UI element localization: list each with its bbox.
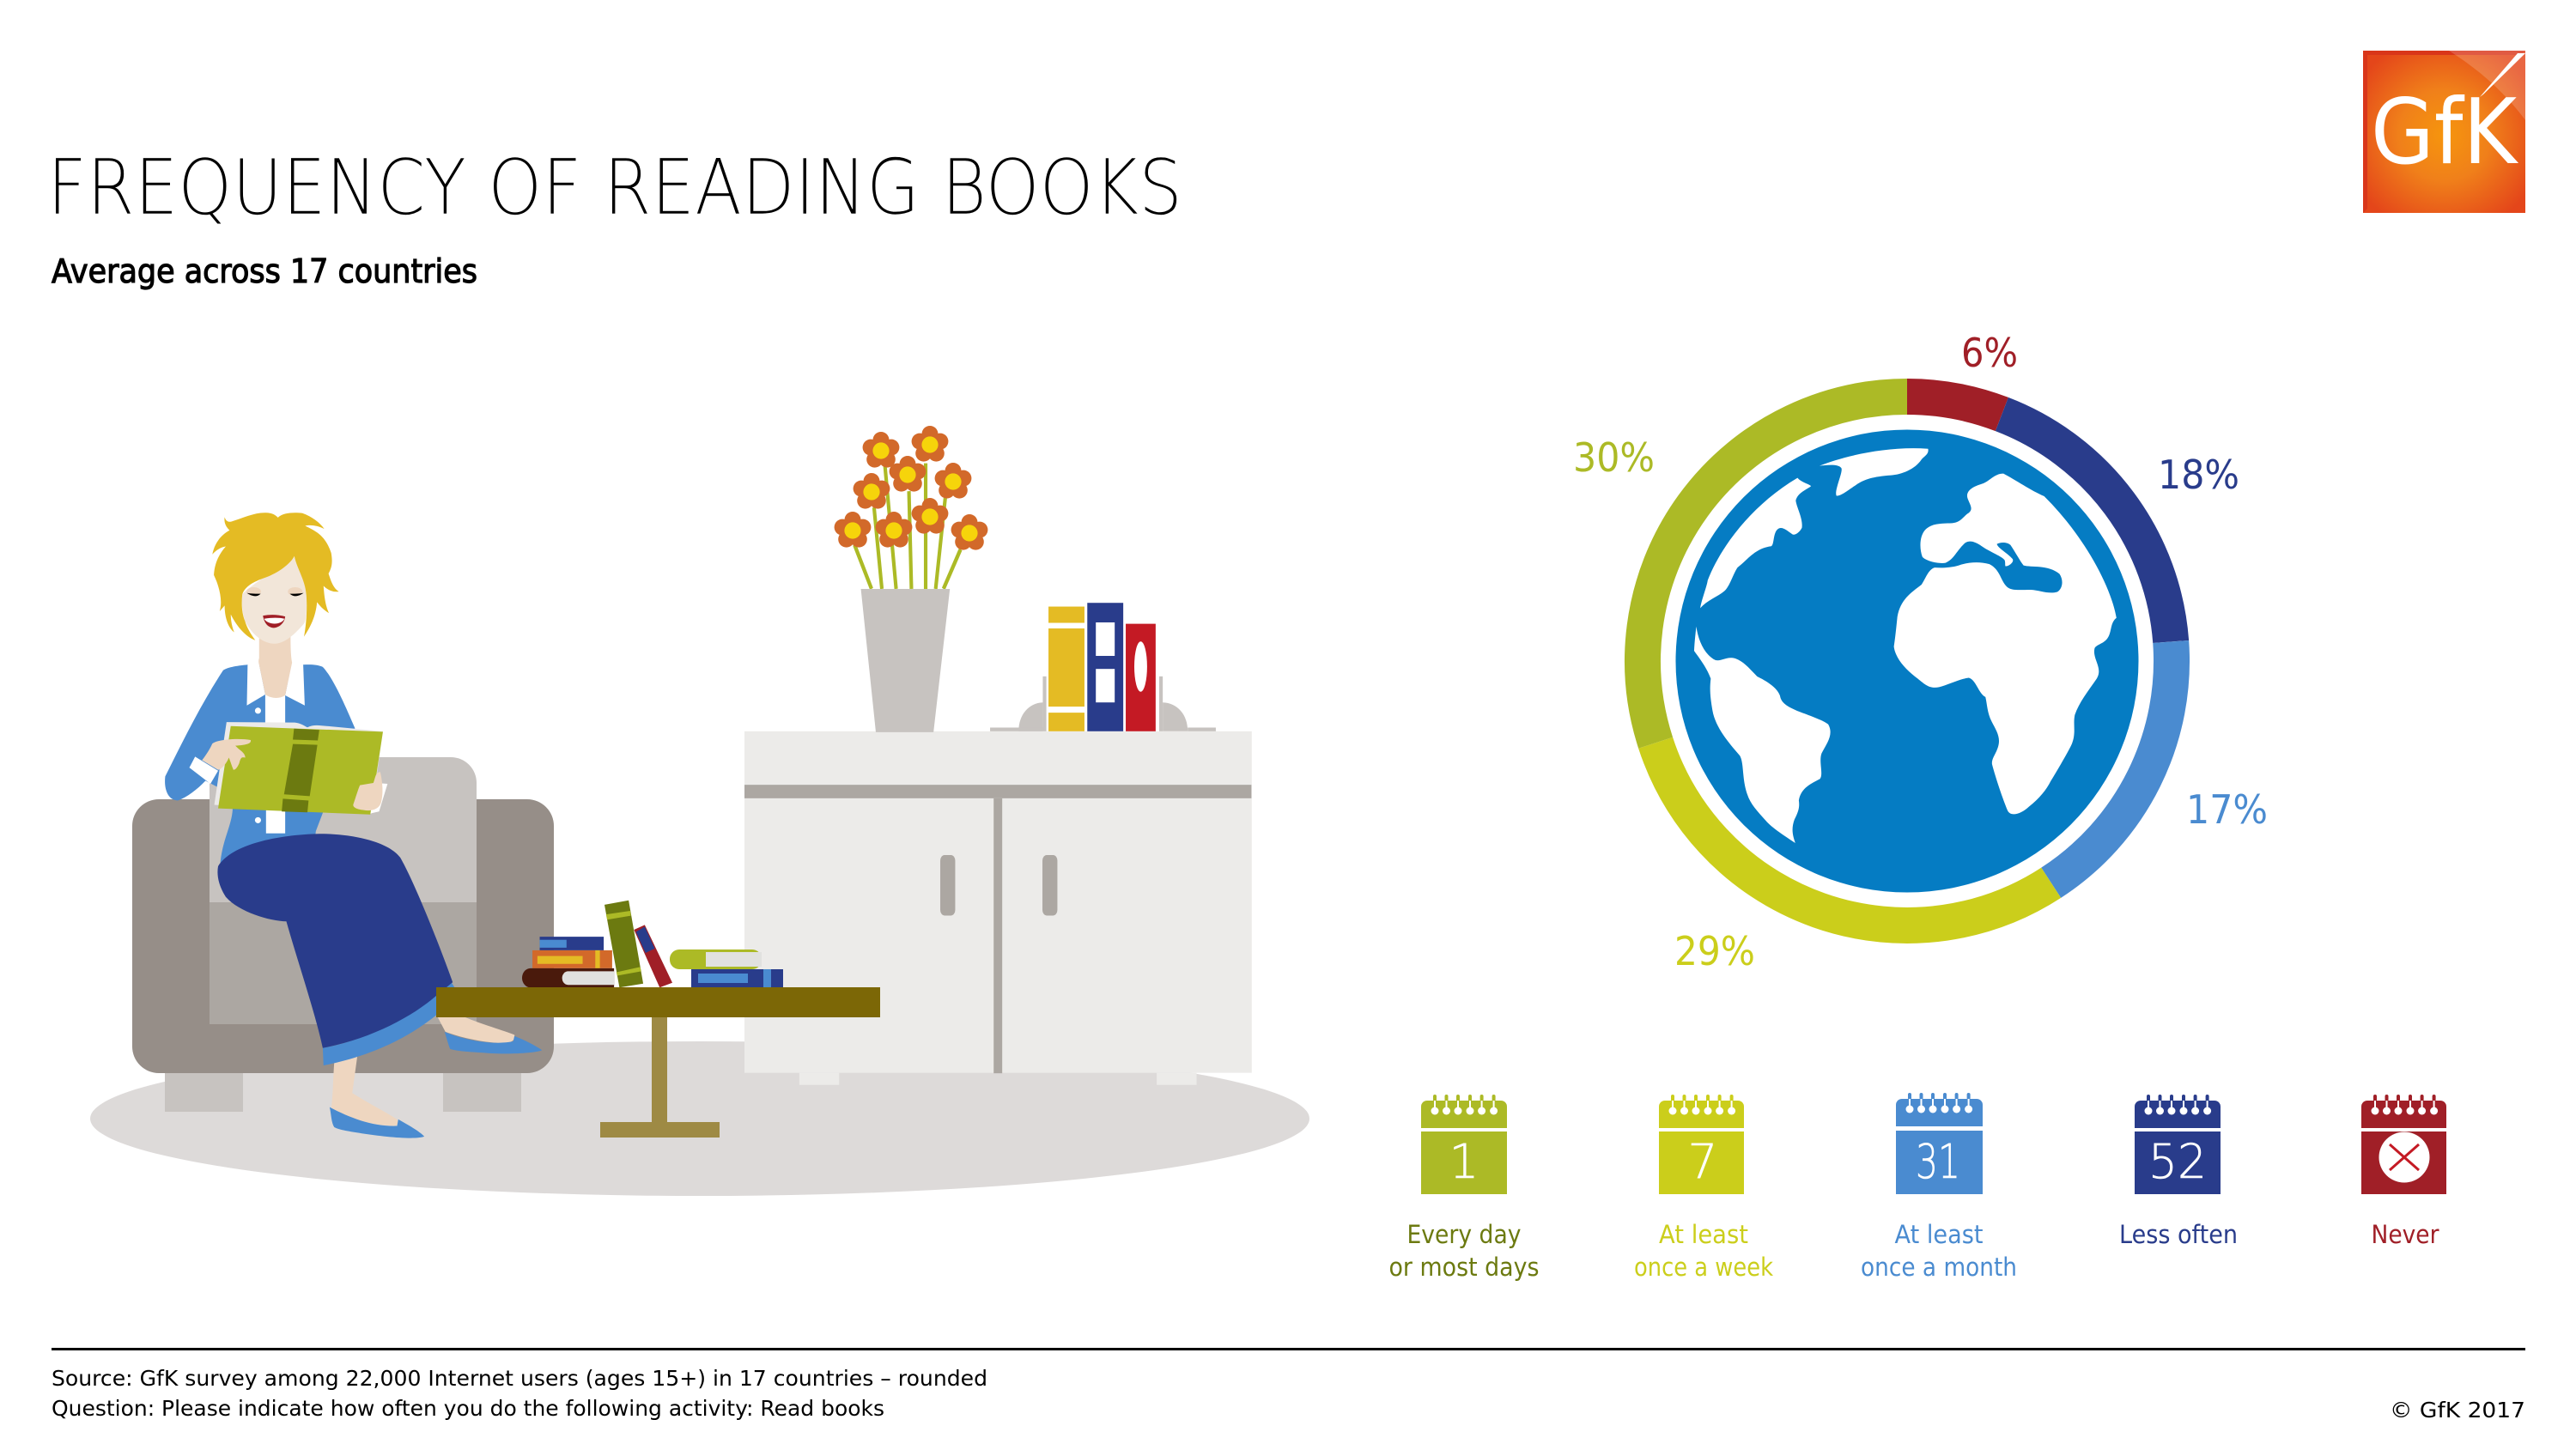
calendar icon 52	[2135, 1095, 2221, 1194]
face	[242, 556, 307, 644]
flowers	[835, 426, 987, 550]
right hand	[353, 772, 382, 810]
segment: at least once a week 29%	[1656, 743, 2051, 925]
label 18%: 18%	[2158, 452, 2239, 498]
armchair	[132, 757, 554, 1112]
back leg and shoe	[330, 1057, 424, 1138]
subtitle: Average across 17 countries	[52, 252, 477, 290]
navy binder	[1087, 603, 1123, 731]
legend: at least once a month: At least	[1894, 1220, 1984, 1249]
legend: never	[2361, 1095, 2446, 1249]
label 30%: 30%	[1573, 434, 1655, 481]
legend: at least once a month: once a month	[1861, 1253, 2017, 1282]
question note: Question: Please indicate how often you do the following activity: Read books	[52, 1396, 884, 1421]
shirt and collar	[246, 660, 305, 834]
red binder	[1126, 624, 1156, 731]
south america	[1694, 627, 1831, 843]
yellow book	[1048, 607, 1084, 731]
logo: GfK: GfK	[2371, 80, 2519, 185]
floor ellipse	[90, 1041, 1309, 1196]
globe	[1676, 429, 2138, 893]
woman reading	[165, 513, 672, 1138]
coffee table	[436, 987, 880, 1138]
label 17%: 17%	[2186, 786, 2268, 833]
flower stems	[854, 464, 961, 589]
label 29%: 29%	[1674, 928, 1755, 974]
neck	[258, 636, 292, 698]
calendar icon 1: 1	[1449, 1134, 1479, 1189]
hair	[212, 513, 339, 640]
legend: every day or most days: or most days	[1389, 1253, 1539, 1282]
legend: at least once a week	[1634, 1095, 1773, 1282]
title: FREQUENCY OF READING BOOKS	[47, 143, 1182, 232]
segment: never 6%	[1907, 397, 2002, 414]
legend: never: Never	[2372, 1220, 2439, 1249]
footer rule	[52, 1348, 2525, 1350]
segment: less often 18%	[2002, 414, 2171, 642]
calendar icon 1	[1421, 1095, 1507, 1194]
calendar icon 52: 52	[2148, 1134, 2207, 1189]
legend: less often: Less often	[2119, 1220, 2238, 1249]
donut chart	[1643, 397, 2172, 925]
north america	[1700, 478, 1811, 608]
legend: at least once a week: once a week	[1634, 1253, 1773, 1282]
label 6%: 6%	[1961, 330, 2018, 376]
legend: every day or most days: Every day	[1406, 1220, 1522, 1249]
source note: Source: GfK survey among 22,000 Internet users (ages 15+) in 17 countries – rounded	[52, 1366, 987, 1391]
segment: at least once a month 17%	[2051, 642, 2172, 883]
legend: less often	[2119, 1095, 2238, 1249]
legend: every day or most days	[1389, 1095, 1539, 1282]
legend: at least once a week: At least	[1659, 1220, 1748, 1249]
calendar icon never	[2361, 1095, 2446, 1194]
open book	[215, 722, 387, 815]
percentage labels	[1573, 330, 2268, 974]
cabinet	[744, 731, 1252, 1085]
europe and africa	[1894, 474, 2117, 814]
bookends	[990, 676, 1216, 731]
greenland	[1820, 448, 1929, 496]
calendar icon 7	[1659, 1095, 1744, 1194]
calendar icon 31: 31	[1916, 1134, 1960, 1189]
right book stack on table	[670, 949, 783, 987]
vase	[861, 589, 950, 732]
calendar icon 7: 7	[1688, 1134, 1717, 1189]
legend: at least once a month	[1861, 1093, 2017, 1282]
calendar icon 31	[1896, 1093, 1983, 1194]
skirt	[217, 834, 454, 1065]
jacket	[165, 664, 355, 866]
copyright: © GfK 2017	[2390, 1398, 2525, 1423]
logo: GfK	[2363, 51, 2525, 213]
front leg and shoe	[438, 1017, 542, 1053]
cuff and left hand	[190, 739, 251, 784]
stacked books on table	[522, 901, 672, 987]
sideboard with vase and books	[744, 464, 1252, 1085]
segment: every day 30%	[1643, 397, 1907, 743]
